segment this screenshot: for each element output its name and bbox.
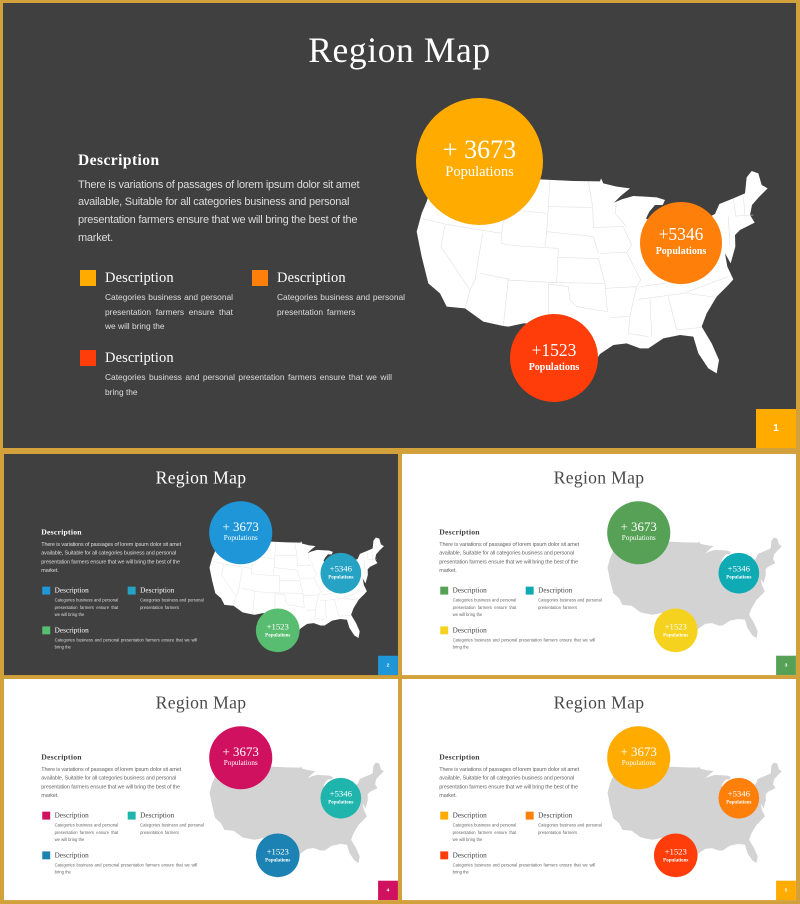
circle: + 3673	[209, 501, 272, 564]
legend item 2	[526, 586, 602, 610]
icon: US map	[608, 538, 782, 638]
legend text: bring the	[55, 870, 71, 874]
icon: US map	[599, 722, 798, 881]
legend text: presentation farmers	[140, 605, 179, 609]
label: Populations	[224, 533, 258, 541]
legend item 3	[440, 851, 597, 876]
value: +1523	[267, 846, 289, 856]
description heading: Description	[439, 528, 480, 536]
page number: 4	[387, 888, 389, 893]
legend heading: Description	[55, 812, 89, 820]
legend text: presentation farmers ensure that	[453, 830, 516, 835]
value: +1523	[532, 340, 576, 360]
legend text	[453, 861, 595, 876]
slide 5: small light orange variant	[402, 679, 796, 900]
description body text: presentation farmers ensure that we will bring the best of the	[439, 784, 578, 790]
legend text	[538, 597, 602, 610]
legend text	[140, 823, 204, 835]
value: + 3673	[223, 745, 259, 759]
legend swatch orange	[252, 270, 268, 286]
legend text: Categories business and personal	[277, 292, 405, 302]
legend text: presentation farmers	[538, 605, 577, 609]
legend heading: Description	[453, 626, 487, 634]
page number: 5	[785, 888, 787, 893]
description body text	[439, 541, 580, 573]
description body text: available, Suitable for all categories business and personal	[439, 549, 574, 555]
legend text: bring the	[453, 870, 469, 874]
description body text: There is variations of passages of lorem ipsum dolor sit amet	[78, 178, 359, 190]
circle: +5346	[320, 552, 361, 593]
description body text: There is variations of passages of lorem ipsum dolor sit amet	[41, 766, 181, 772]
description body text: presentation farmers ensure that we will bring the best of the	[41, 784, 180, 790]
legend text	[54, 597, 118, 617]
page number: 3	[785, 662, 787, 668]
description heading: Description	[78, 152, 160, 169]
value: + 3673	[443, 135, 516, 164]
legend item 1	[440, 812, 516, 842]
legend text	[140, 597, 204, 610]
legend text	[452, 597, 516, 617]
label: Populations	[663, 632, 688, 637]
value: +1523	[267, 621, 289, 631]
legend swatch yellow-orange	[440, 812, 448, 820]
legend heading: Description	[453, 586, 487, 594]
legend heading: Description	[453, 812, 487, 820]
label: Populations	[328, 574, 353, 579]
legend heading: Description	[105, 350, 174, 366]
legend heading: Description	[140, 812, 174, 820]
legend heading: Description	[55, 626, 89, 634]
legend text	[54, 823, 118, 842]
legend text: we will bring the	[453, 611, 482, 616]
page number	[776, 655, 796, 675]
legend text: Categories business and personal	[140, 823, 204, 828]
page number	[378, 655, 398, 675]
label: Populations	[265, 632, 290, 637]
legend text	[452, 823, 516, 842]
legend text: we will bring the	[105, 321, 165, 331]
page number: 2	[387, 662, 389, 668]
icon: US map	[210, 538, 384, 638]
description body text: market.	[439, 793, 457, 798]
label: Populations	[663, 857, 688, 863]
description body text: available, Suitable for all categories business and personal	[78, 196, 349, 208]
legend item 1	[42, 812, 118, 842]
legend text: Categories business and personal	[538, 597, 602, 602]
legend swatch orange	[526, 812, 534, 820]
legend swatch blue	[42, 851, 50, 859]
legend text: Categories business and personal presentation farmers ensure that we will	[105, 372, 392, 382]
legend text: Categories business and personal	[55, 823, 118, 828]
legend text: Categories business and personal	[105, 292, 233, 302]
description body text: market.	[78, 232, 113, 244]
legend text: presentation farmers ensure that	[453, 605, 516, 609]
legend item 3	[80, 350, 392, 396]
legend swatch teal	[526, 586, 534, 594]
circle: +5346	[718, 552, 759, 593]
legend text: bring the	[453, 644, 469, 649]
description body text: available, Suitable for all categories business and personal	[439, 775, 574, 781]
page number: 1	[773, 423, 779, 434]
legend text: Categories business and personal presentation farmers ensure that we will	[55, 637, 197, 642]
page number	[378, 881, 398, 900]
legend swatch yellow-orange	[80, 270, 96, 286]
description body text: market.	[41, 567, 59, 573]
description body text: available, Suitable for all categories business and personal	[41, 549, 176, 555]
circle: +5346	[718, 778, 759, 819]
legend text: Categories business and personal	[140, 597, 204, 602]
legend item 3	[42, 626, 198, 650]
description body text	[439, 766, 580, 798]
legend text	[105, 292, 233, 331]
icon: US map	[210, 762, 384, 863]
value: +5346	[659, 224, 703, 244]
legend heading: Description	[453, 851, 487, 859]
legend heading: Description	[55, 851, 89, 859]
label: Populations	[726, 799, 751, 805]
legend text	[105, 372, 392, 396]
description heading: Description	[41, 753, 82, 761]
legend text: Categories business and personal	[538, 823, 602, 828]
legend text: Categories business and personal	[55, 597, 118, 602]
legend swatch green	[42, 626, 50, 634]
description body text: There is variations of passages of lorem ipsum dolor sit amet	[439, 541, 579, 547]
label: Populations	[656, 246, 706, 256]
legend swatch magenta	[42, 812, 50, 820]
legend text: presentation farmers ensure that	[105, 307, 233, 317]
label: Populations	[328, 799, 353, 805]
value: +5346	[330, 563, 352, 573]
legend text: we will bring the	[55, 611, 84, 616]
slide 1: large dark region map	[3, 3, 796, 448]
description body text: market.	[41, 793, 59, 798]
description body text: presentation farmers ensure that we will bring the best of the	[78, 214, 357, 226]
description block	[439, 753, 580, 798]
value: +1523	[665, 846, 687, 856]
value: + 3673	[621, 745, 657, 759]
circle: +5346	[640, 202, 722, 284]
legend swatch green	[440, 586, 448, 594]
description block	[41, 528, 182, 573]
description block	[78, 152, 360, 244]
circle: + 3673	[416, 98, 543, 225]
legend swatch teal	[128, 812, 136, 820]
legend item 3	[42, 851, 197, 874]
description block	[41, 753, 182, 798]
description heading: Description	[439, 753, 480, 761]
legend text: Categories business and personal	[453, 823, 516, 828]
value: +1523	[665, 621, 687, 631]
legend text	[452, 637, 595, 650]
legend text	[277, 292, 405, 317]
legend item 2	[128, 586, 204, 610]
description body text	[41, 541, 182, 573]
legend text: presentation farmers ensure that	[55, 830, 118, 835]
legend swatch blue	[42, 586, 50, 594]
legend text: we will bring the	[453, 837, 482, 842]
label: Populations	[445, 164, 514, 180]
legend text: presentation farmers	[277, 307, 355, 317]
page number	[756, 409, 796, 448]
legend heading: Description	[538, 812, 572, 820]
title: Region Map	[308, 30, 491, 70]
label: Populations	[622, 759, 656, 767]
circle: + 3673	[209, 726, 272, 789]
legend item 3	[440, 626, 595, 650]
value: +5346	[728, 789, 750, 799]
label: Populations	[622, 533, 656, 541]
circle: +1523	[654, 608, 698, 652]
description body text: presentation farmers ensure that we will bring the best of the	[439, 558, 578, 564]
circle: +1523	[654, 834, 698, 877]
legend text: presentation farmers ensure that	[55, 605, 118, 609]
legend item 2	[128, 812, 204, 835]
circle: +1523	[256, 608, 300, 652]
legend text	[538, 822, 602, 836]
title: Region Map	[156, 467, 246, 487]
legend heading: Description	[140, 586, 174, 594]
page number	[776, 881, 796, 900]
legend text: bring the	[105, 386, 138, 396]
legend swatch teal	[128, 586, 136, 594]
legend text	[54, 862, 197, 874]
legend heading: Description	[538, 586, 572, 594]
label: Populations	[265, 857, 290, 863]
circle: +5346	[320, 778, 361, 819]
description body text: There is variations of passages of lorem ipsum dolor sit amet	[41, 541, 181, 547]
legend text: bring the	[55, 644, 71, 649]
value: + 3673	[621, 519, 657, 533]
slide 3: small light green variant	[402, 454, 796, 675]
description heading: Description	[41, 528, 82, 536]
legend text: Categories business and personal presentation farmers ensure that we will	[453, 862, 595, 867]
legend text: presentation farmers	[140, 830, 179, 835]
description body text: market.	[439, 567, 457, 573]
label: Populations	[726, 574, 751, 579]
legend text: Categories business and personal presentation farmers ensure that we will	[453, 637, 595, 642]
legend text: we will bring the	[55, 837, 84, 842]
slide 2: small dark blue variant	[4, 454, 398, 675]
title: Region Map	[554, 692, 644, 712]
circle: +1523	[510, 314, 598, 402]
value: + 3673	[223, 519, 259, 533]
icon: US map	[416, 171, 768, 374]
description block	[439, 528, 580, 573]
slide 4: small light magenta variant	[4, 679, 398, 900]
title: Region Map	[156, 692, 246, 712]
legend item 2	[252, 270, 405, 317]
legend text	[54, 637, 198, 650]
value: +5346	[728, 563, 750, 573]
legend text: Categories business and personal	[453, 597, 516, 602]
legend text: Categories business and personal presentation farmers ensure that we will	[55, 862, 197, 867]
legend heading: Description	[277, 270, 346, 286]
legend heading: Description	[105, 270, 174, 286]
description body text: available, Suitable for all categories business and personal	[41, 775, 176, 781]
description body text: There is variations of passages of lorem ipsum dolor sit amet	[439, 766, 579, 772]
legend swatch red	[80, 350, 96, 366]
legend item 2	[526, 812, 603, 843]
legend swatch yellow	[440, 626, 448, 634]
value: +5346	[330, 789, 352, 799]
label: Populations	[529, 362, 579, 373]
circle: + 3673	[607, 726, 670, 789]
description body text: presentation farmers ensure that we will bring the best of the	[41, 558, 180, 564]
circle: + 3673	[607, 501, 670, 564]
circle: +1523	[256, 834, 300, 877]
legend text: presentation farmers	[538, 830, 577, 835]
legend swatch red	[440, 851, 448, 859]
description body text	[78, 178, 360, 244]
title: Region Map	[554, 467, 644, 487]
legend item 1	[440, 586, 516, 617]
description body text	[41, 766, 182, 798]
legend heading: Description	[55, 586, 89, 594]
label: Populations	[224, 759, 258, 767]
legend item 1	[42, 586, 118, 617]
legend item 1	[80, 270, 233, 331]
